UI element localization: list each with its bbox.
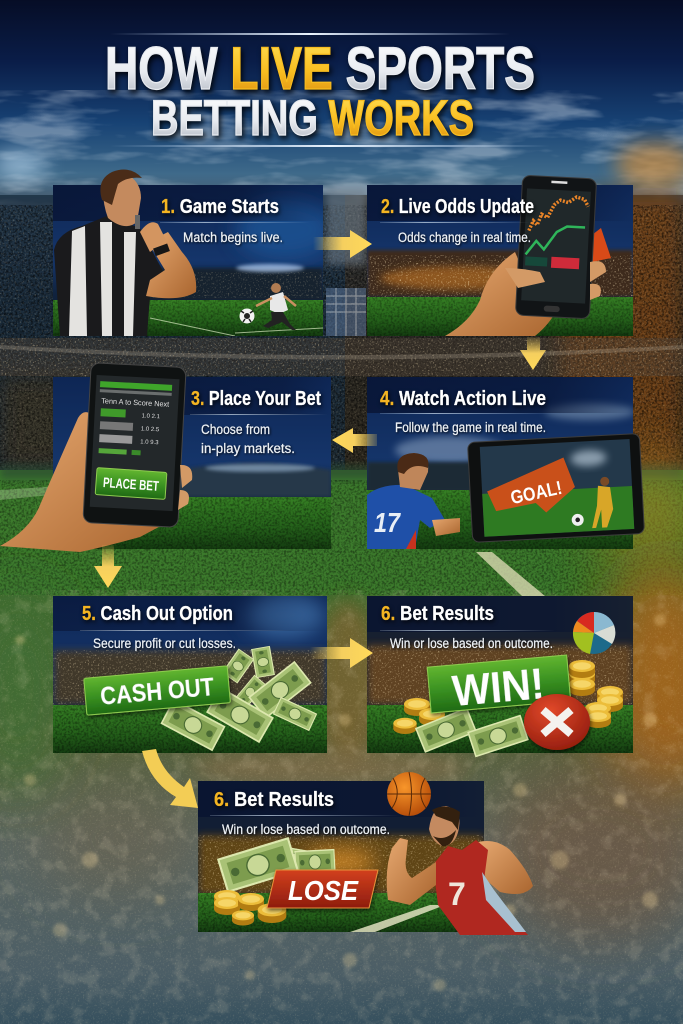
arrow: step 3 to 5 — [94, 545, 122, 588]
icon: basketball player: 7 — [448, 876, 466, 912]
title line 1: HOW LIVE SPORTS — [105, 35, 535, 102]
step 2 heading: 2. Live Odds Update — [381, 196, 534, 218]
step 6 heading: 6. Bet Results — [214, 789, 334, 811]
step 2 text: Odds change in real time. — [398, 230, 531, 245]
win sign — [427, 655, 571, 718]
step 6 text: Win or lose based on outcome. — [222, 822, 390, 837]
step 5 heading: 5. Cash Out Option — [82, 603, 233, 625]
panel: step 6 lose result — [198, 772, 533, 935]
win sign: WIN! — [450, 659, 546, 716]
panel: step 1 game starts — [53, 170, 335, 336]
arrow: step 5 to 6 — [310, 638, 373, 668]
place bet button — [95, 468, 167, 499]
phone with bet slip: 1.0 2.5 — [141, 426, 160, 433]
place bet button: PLACE BET — [103, 474, 160, 494]
phone with bet slip: 1.0 2.1 — [141, 413, 161, 420]
icon: hand holding phone — [0, 363, 192, 552]
panel: step 2 live odds update — [367, 175, 633, 336]
icon: hand holding phone — [445, 175, 606, 336]
panel: step 4 watch action live — [367, 377, 644, 549]
icon: gold coin stacks — [214, 890, 286, 926]
panel: step 6 win result — [367, 596, 633, 756]
panel: step 5 cash out option — [53, 593, 327, 753]
step 3 heading: 3. Place Your Bet — [191, 388, 321, 410]
step 3 text: Choose from — [201, 422, 270, 437]
icon: basketball — [387, 772, 431, 816]
arrow: step 4 to 3 — [332, 428, 377, 453]
arrow: step 2 to 4 — [520, 337, 546, 370]
phone with bet slip: Tenn A to Score Next — [101, 396, 170, 409]
title line 2: BETTING WORKS — [151, 90, 474, 146]
step 6 text: Win or lose based on outcome. — [390, 636, 553, 651]
icon: soccer ball — [240, 308, 254, 324]
icon: basketball player — [387, 806, 533, 935]
step 5 text: Secure profit or cut losses. — [93, 636, 236, 651]
step 3 text: in-play markets. — [201, 441, 295, 456]
title — [105, 33, 550, 147]
arrow: step 1 to 2 — [313, 230, 372, 258]
icon: red flag — [588, 228, 611, 262]
floodlight tower — [326, 288, 366, 336]
step 4 text: Follow the game in real time. — [395, 420, 546, 435]
lose banner: LOSE — [288, 875, 359, 906]
icon: gold coin stacks — [393, 660, 623, 734]
step 1 heading: 1. Game Starts — [161, 196, 279, 218]
cash out button: CASH OUT — [99, 673, 215, 711]
icon: red x button — [524, 694, 590, 750]
arrow: step 5 to lose result — [142, 749, 198, 808]
phone with bet slip: 1.0 9.3 — [140, 439, 159, 446]
icon: player number 17: 17 — [374, 507, 401, 538]
icon: referee — [54, 170, 196, 336]
icon: tablet showing goal — [467, 434, 644, 542]
icon: banknotes — [162, 646, 316, 750]
icon: banknotes — [416, 708, 528, 756]
step 6 heading: 6. Bet Results — [381, 603, 494, 625]
step 4 heading: 4. Watch Action Live — [380, 388, 546, 410]
icon: banknotes — [218, 838, 335, 892]
icon: player number 17 — [367, 453, 460, 549]
icon: pie chart — [573, 612, 615, 654]
icon: soccer player — [256, 283, 296, 330]
lose banner — [267, 870, 378, 908]
goal text: GOAL! — [509, 478, 564, 509]
phone with bet slip — [83, 363, 186, 527]
phone with odds chart — [515, 175, 597, 319]
panel: step 3 place your bet — [0, 363, 331, 552]
step 1 text: Match begins live. — [183, 230, 283, 245]
